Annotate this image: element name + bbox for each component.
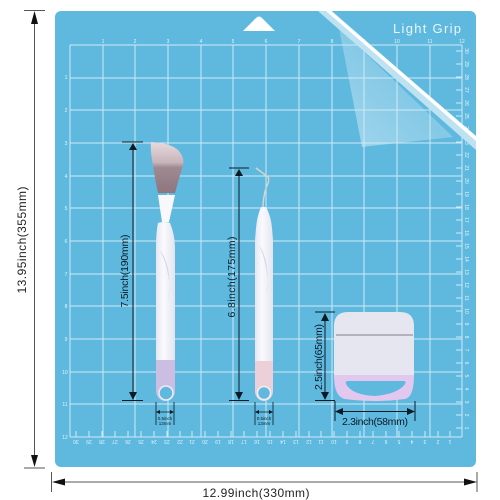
ruler numbers: 2 [463,414,469,417]
ruler numbers: 8 [331,39,334,45]
ruler numbers: 16 [254,438,260,444]
ruler numbers: 16 [463,230,469,236]
ruler numbers: 7 [298,39,301,45]
ruler numbers: 11 [463,295,469,301]
ruler numbers: 25 [138,438,144,444]
ruler numbers: 3 [167,39,170,45]
ruler numbers: 9 [345,438,348,444]
dimension: mat height: 13.95inch(355mm) [15,186,29,294]
hanger notch [243,16,275,31]
dimension: hook height [226,168,249,400]
ruler numbers: 4 [200,39,203,45]
ruler numbers: 7 [65,272,68,278]
ruler numbers: 12 [306,438,312,444]
ruler numbers: 1 [65,75,68,81]
tool: weeding hook [255,168,273,401]
dimension: brush height [119,142,143,400]
ruler numbers: 10 [331,438,337,444]
ruler numbers: 14 [463,256,469,262]
ruler numbers: 28 [463,74,469,80]
ruler numbers: 30 [463,48,469,54]
ruler numbers: 18 [228,438,234,444]
ruler numbers: 3 [463,401,469,404]
dimension: brush width: 0.5inch [158,416,173,421]
dimension: mat width [52,472,477,500]
ruler numbers: 30 [73,438,79,444]
film peel [339,28,453,147]
ruler numbers: 1 [102,39,105,45]
ruler numbers: 12 [463,282,469,288]
dimension: scraper width [335,401,415,428]
ruler numbers: 4 [65,174,68,180]
ruler numbers: 19 [463,191,469,197]
ruler numbers: 3 [65,141,68,147]
dimension: scraper height: 2.5inch(65mm) [313,324,325,390]
ruler numbers: 6 [463,362,469,365]
ruler numbers [62,39,469,444]
ruler numbers: 24 [151,438,157,444]
ruler numbers: 13 [463,269,469,275]
film edge strip [318,11,476,150]
ruler numbers: 20 [463,178,469,184]
ruler numbers: 2 [436,438,439,444]
panel: cutting mat [55,11,476,467]
ruler numbers: 4 [410,438,413,444]
ruler numbers: 15 [463,243,469,249]
ruler numbers: 11 [427,39,433,45]
dimension: scraper width: 2.3inch(58mm) [342,416,408,428]
ruler numbers: 7 [371,438,374,444]
ruler numbers: 27 [112,438,118,444]
ruler numbers: 9 [65,337,68,343]
dimension: hook width: 0.5inch [257,416,272,421]
ruler numbers: 11 [62,402,68,408]
ruler numbers: 3 [423,438,426,444]
ruler numbers: 25 [463,113,469,119]
ruler numbers: 7 [463,349,469,352]
dimension: scraper height [313,312,335,400]
ruler numbers: 5 [397,438,400,444]
ruler numbers: 10 [463,308,469,314]
ruler numbers: 14 [280,438,286,444]
ruler numbers: 18 [463,204,469,210]
dimension: mat width: 12.99inch(330mm) [202,486,310,500]
ruler numbers: 29 [463,61,469,67]
ruler numbers: 24 [463,126,469,132]
dimension: brush width [156,402,174,426]
ruler numbers: 6 [384,438,387,444]
ruler numbers: 9 [363,39,366,45]
tool: brush [151,142,183,401]
ruler numbers: 21 [463,165,469,171]
ruler numbers: 22 [177,438,183,444]
ruler numbers: 4 [463,388,469,391]
mat label: Light Grip [393,21,462,36]
dimension: hook height: 6.8inch(175mm) [226,236,238,318]
ruler numbers: 2 [65,108,68,114]
tool: scraper [334,312,414,401]
ruler numbers: 6 [265,39,268,45]
ruler numbers: 8 [463,336,469,339]
ruler numbers: 2 [134,39,137,45]
ruler numbers: 23 [463,139,469,145]
ruler numbers: 12 [62,435,68,441]
ruler numbers: 12 [459,39,465,45]
ruler numbers: 20 [202,438,208,444]
dimension: brush width: 13mm [159,421,171,426]
ruler numbers: 5 [65,206,68,212]
ruler numbers: 10 [62,370,68,376]
dimension: hook width: 13mm [258,421,270,426]
ruler numbers: 8 [65,304,68,310]
grid [70,45,462,437]
ruler numbers: 9 [463,323,469,326]
ruler numbers: 21 [189,438,195,444]
ruler numbers: 17 [463,217,469,223]
ruler numbers: 13 [293,438,299,444]
ruler numbers: 1 [463,427,469,430]
ruler numbers: 26 [125,438,131,444]
ruler numbers: 28 [99,438,105,444]
ruler numbers: 29 [86,438,92,444]
ruler numbers: 27 [463,87,469,93]
ruler numbers: 22 [463,152,469,158]
dimension: mat height [15,10,45,468]
ruler numbers: 6 [65,239,68,245]
ruler numbers: 8 [358,438,361,444]
ruler numbers: 11 [318,438,324,444]
ruler numbers: 5 [463,375,469,378]
ruler numbers: 1 [448,438,451,444]
dimension: brush height: 7.5inch(190mm) [119,234,131,308]
ruler numbers: 15 [267,438,273,444]
ruler numbers: 19 [215,438,221,444]
ruler numbers: 23 [164,438,170,444]
ruler numbers: 17 [241,438,247,444]
ruler numbers: 10 [394,39,400,45]
ruler numbers: 5 [232,39,235,45]
ruler numbers: 26 [463,100,469,106]
dimension: hook width [255,402,273,426]
